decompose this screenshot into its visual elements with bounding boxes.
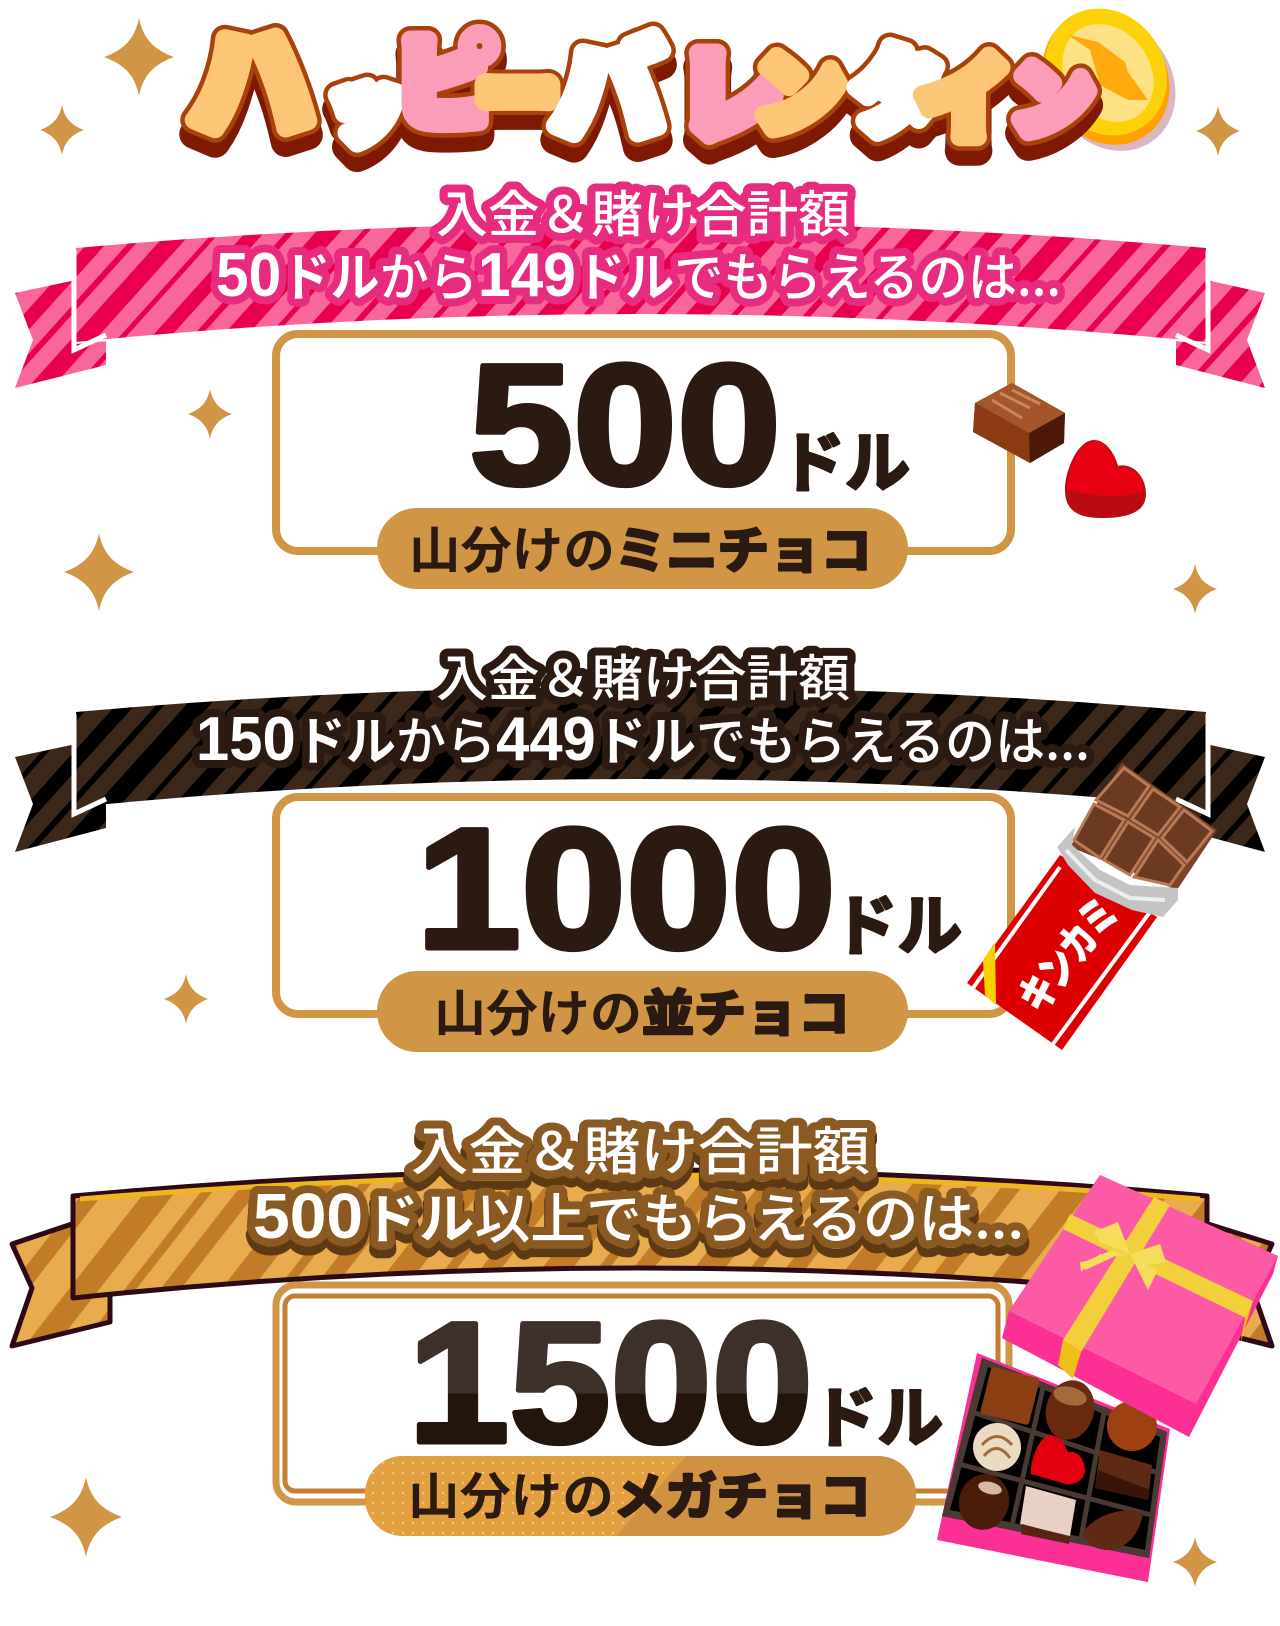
icon: gold coin (1017, 0, 1201, 176)
heading: tier 1 condition: 50ドルから149ドルでもらえるのは... (216, 236, 1061, 311)
title: タ (852, 19, 944, 152)
prize amount 500: 500 (469, 329, 781, 521)
heading: tier 3 condition: 500ドル以上でもらえるのは... (253, 1175, 1024, 1254)
title: タ (852, 33, 944, 166)
heading: tier 3 condition: 入金＆賭け合計額 (411, 1110, 870, 1185)
prize amount 1500: ドル (812, 1365, 943, 1461)
heading: tier 2 condition (196, 639, 1090, 775)
panel: tier 2 ribbon (15, 687, 1265, 852)
title: ピ (396, 2, 496, 147)
icon: chocolate bar (967, 763, 1217, 1050)
title: ン (1012, 36, 1092, 152)
title: イ (918, 26, 1010, 159)
prize amount 500 (469, 329, 910, 521)
panel: tier 1 prize box (276, 329, 1011, 589)
title: ン (755, 24, 843, 151)
title: タ (852, 19, 944, 152)
title (190, 0, 1092, 177)
title: レ (680, 14, 780, 159)
heading: tier 2 condition: 150ドルから449ドルでもらえるのは... (196, 700, 1090, 775)
prize amount 1500: 1500 (408, 1287, 813, 1479)
title: レ (680, 14, 780, 159)
heading: tier 2 condition: 入金＆賭け合計額 (436, 639, 850, 711)
panel: tier 1 ribbon (15, 223, 1265, 388)
icon: mini chocolates (973, 383, 1146, 518)
icon: chocolate bar: キンカミ (1002, 883, 1130, 1023)
heading: tier 1 condition: 入金＆賭け合計額 (436, 175, 850, 247)
heading: tier 3 condition: 入金＆賭け合計額 (411, 1118, 870, 1193)
title: ン (1012, 36, 1092, 152)
title: バ (553, 2, 663, 162)
title: ハ (190, 0, 312, 177)
panel: tier 2 prize box (276, 793, 1011, 1052)
title: バ (553, 2, 663, 162)
prize pill: 山分けのメガチョコ (408, 1457, 871, 1529)
title: ー (480, 48, 555, 157)
icon: chocolate assortment box (937, 1175, 1278, 1582)
heading: tier 3 condition: 500ドル以上でもらえるのは... (253, 1183, 1024, 1262)
title: ッ (326, 57, 406, 173)
title: ピ (396, 16, 496, 161)
prize amount 1000: ドル (833, 873, 962, 969)
panel: tier 3 ribbon (12, 1170, 1272, 1346)
title: ー (480, 34, 555, 143)
prize amount 500: ドル (780, 410, 910, 506)
title: イ (918, 40, 1010, 173)
panel: tier 3 prize box (276, 1285, 1009, 1536)
title: バ (553, 16, 663, 176)
title: ッ (326, 43, 406, 159)
title: ッ (326, 43, 406, 159)
heading: tier 1 condition (216, 175, 1061, 311)
title: イ (918, 26, 1010, 159)
prize pill (377, 971, 908, 1052)
title: レ (680, 28, 780, 173)
title: ン (755, 38, 843, 165)
title: ン (755, 24, 843, 151)
heading: tier 3 condition (253, 1110, 1024, 1262)
title: ン (1012, 50, 1092, 166)
prize pill: 山分けのミニチョコ (409, 511, 872, 583)
prize amount 1000: 1000 (416, 793, 836, 985)
prize pill: 山分けの並チョコ (434, 974, 850, 1046)
title: ー (480, 34, 555, 143)
title: ピ (396, 2, 496, 147)
